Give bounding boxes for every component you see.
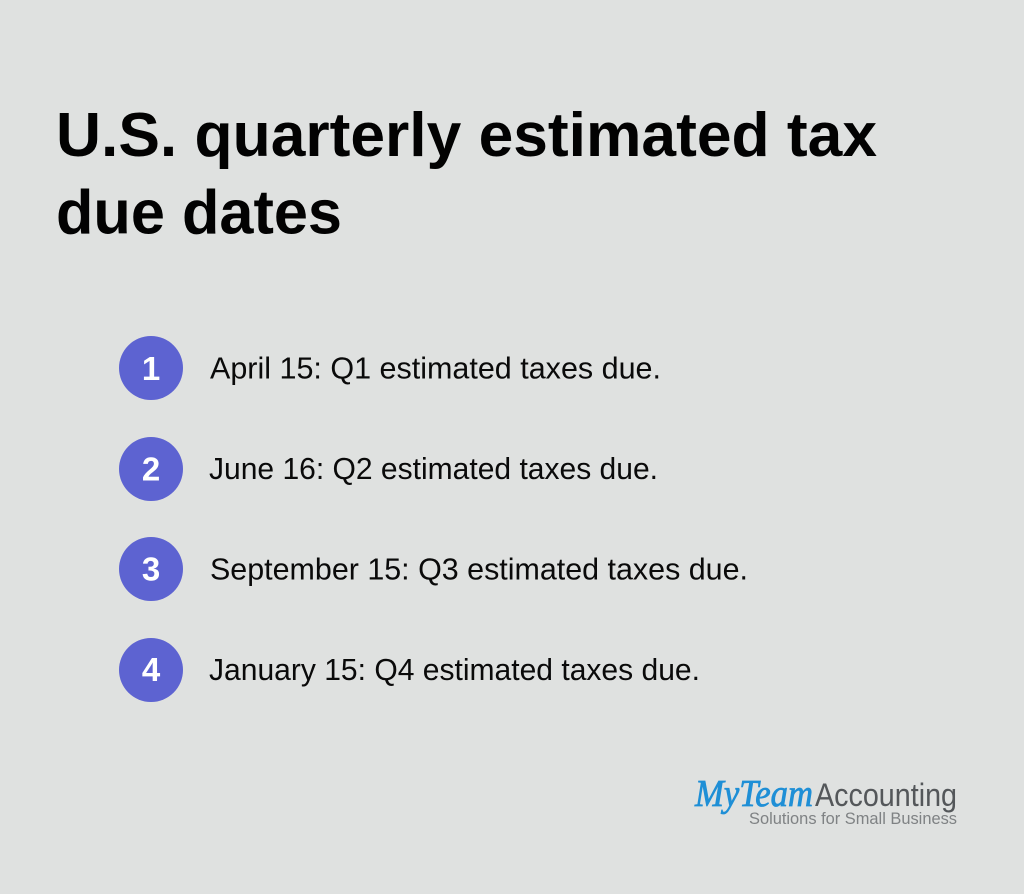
logo: MyTeam Accounting [694, 773, 957, 828]
item 4: January 15 [119, 638, 700, 702]
title: U.S. quarterly estimated tax [56, 101, 878, 170]
list of due dates [119, 336, 748, 702]
title [56, 101, 878, 248]
item 1 text: April 15: Q1 estimated taxes due. [210, 352, 661, 386]
item 1: April 15 [119, 336, 661, 400]
item 2 text: June 16: Q2 estimated taxes due. [209, 452, 658, 486]
number badge 1 [119, 336, 183, 400]
logo: MyTeam Accounting: Accounting [815, 777, 957, 813]
title: due dates [56, 178, 342, 248]
number badge 2: 2 [142, 450, 160, 488]
item 4 text: January 15: Q4 estimated taxes due. [209, 653, 700, 687]
number badge 2 [119, 437, 183, 501]
number badge 3 [119, 537, 183, 601]
number badge 3: 3 [142, 550, 160, 588]
number badge 4 [119, 638, 183, 702]
item 3: September 15 [119, 537, 748, 601]
number badge 4: 4 [142, 651, 161, 688]
item 2: June 16 [119, 437, 658, 501]
logo: MyTeam Accounting: Solutions for Small Business [749, 809, 957, 828]
logo: MyTeam Accounting: MyTeam [694, 773, 813, 815]
number badge 1: 1 [142, 350, 160, 387]
item 3 text: September 15: Q3 estimated taxes due. [210, 552, 748, 586]
